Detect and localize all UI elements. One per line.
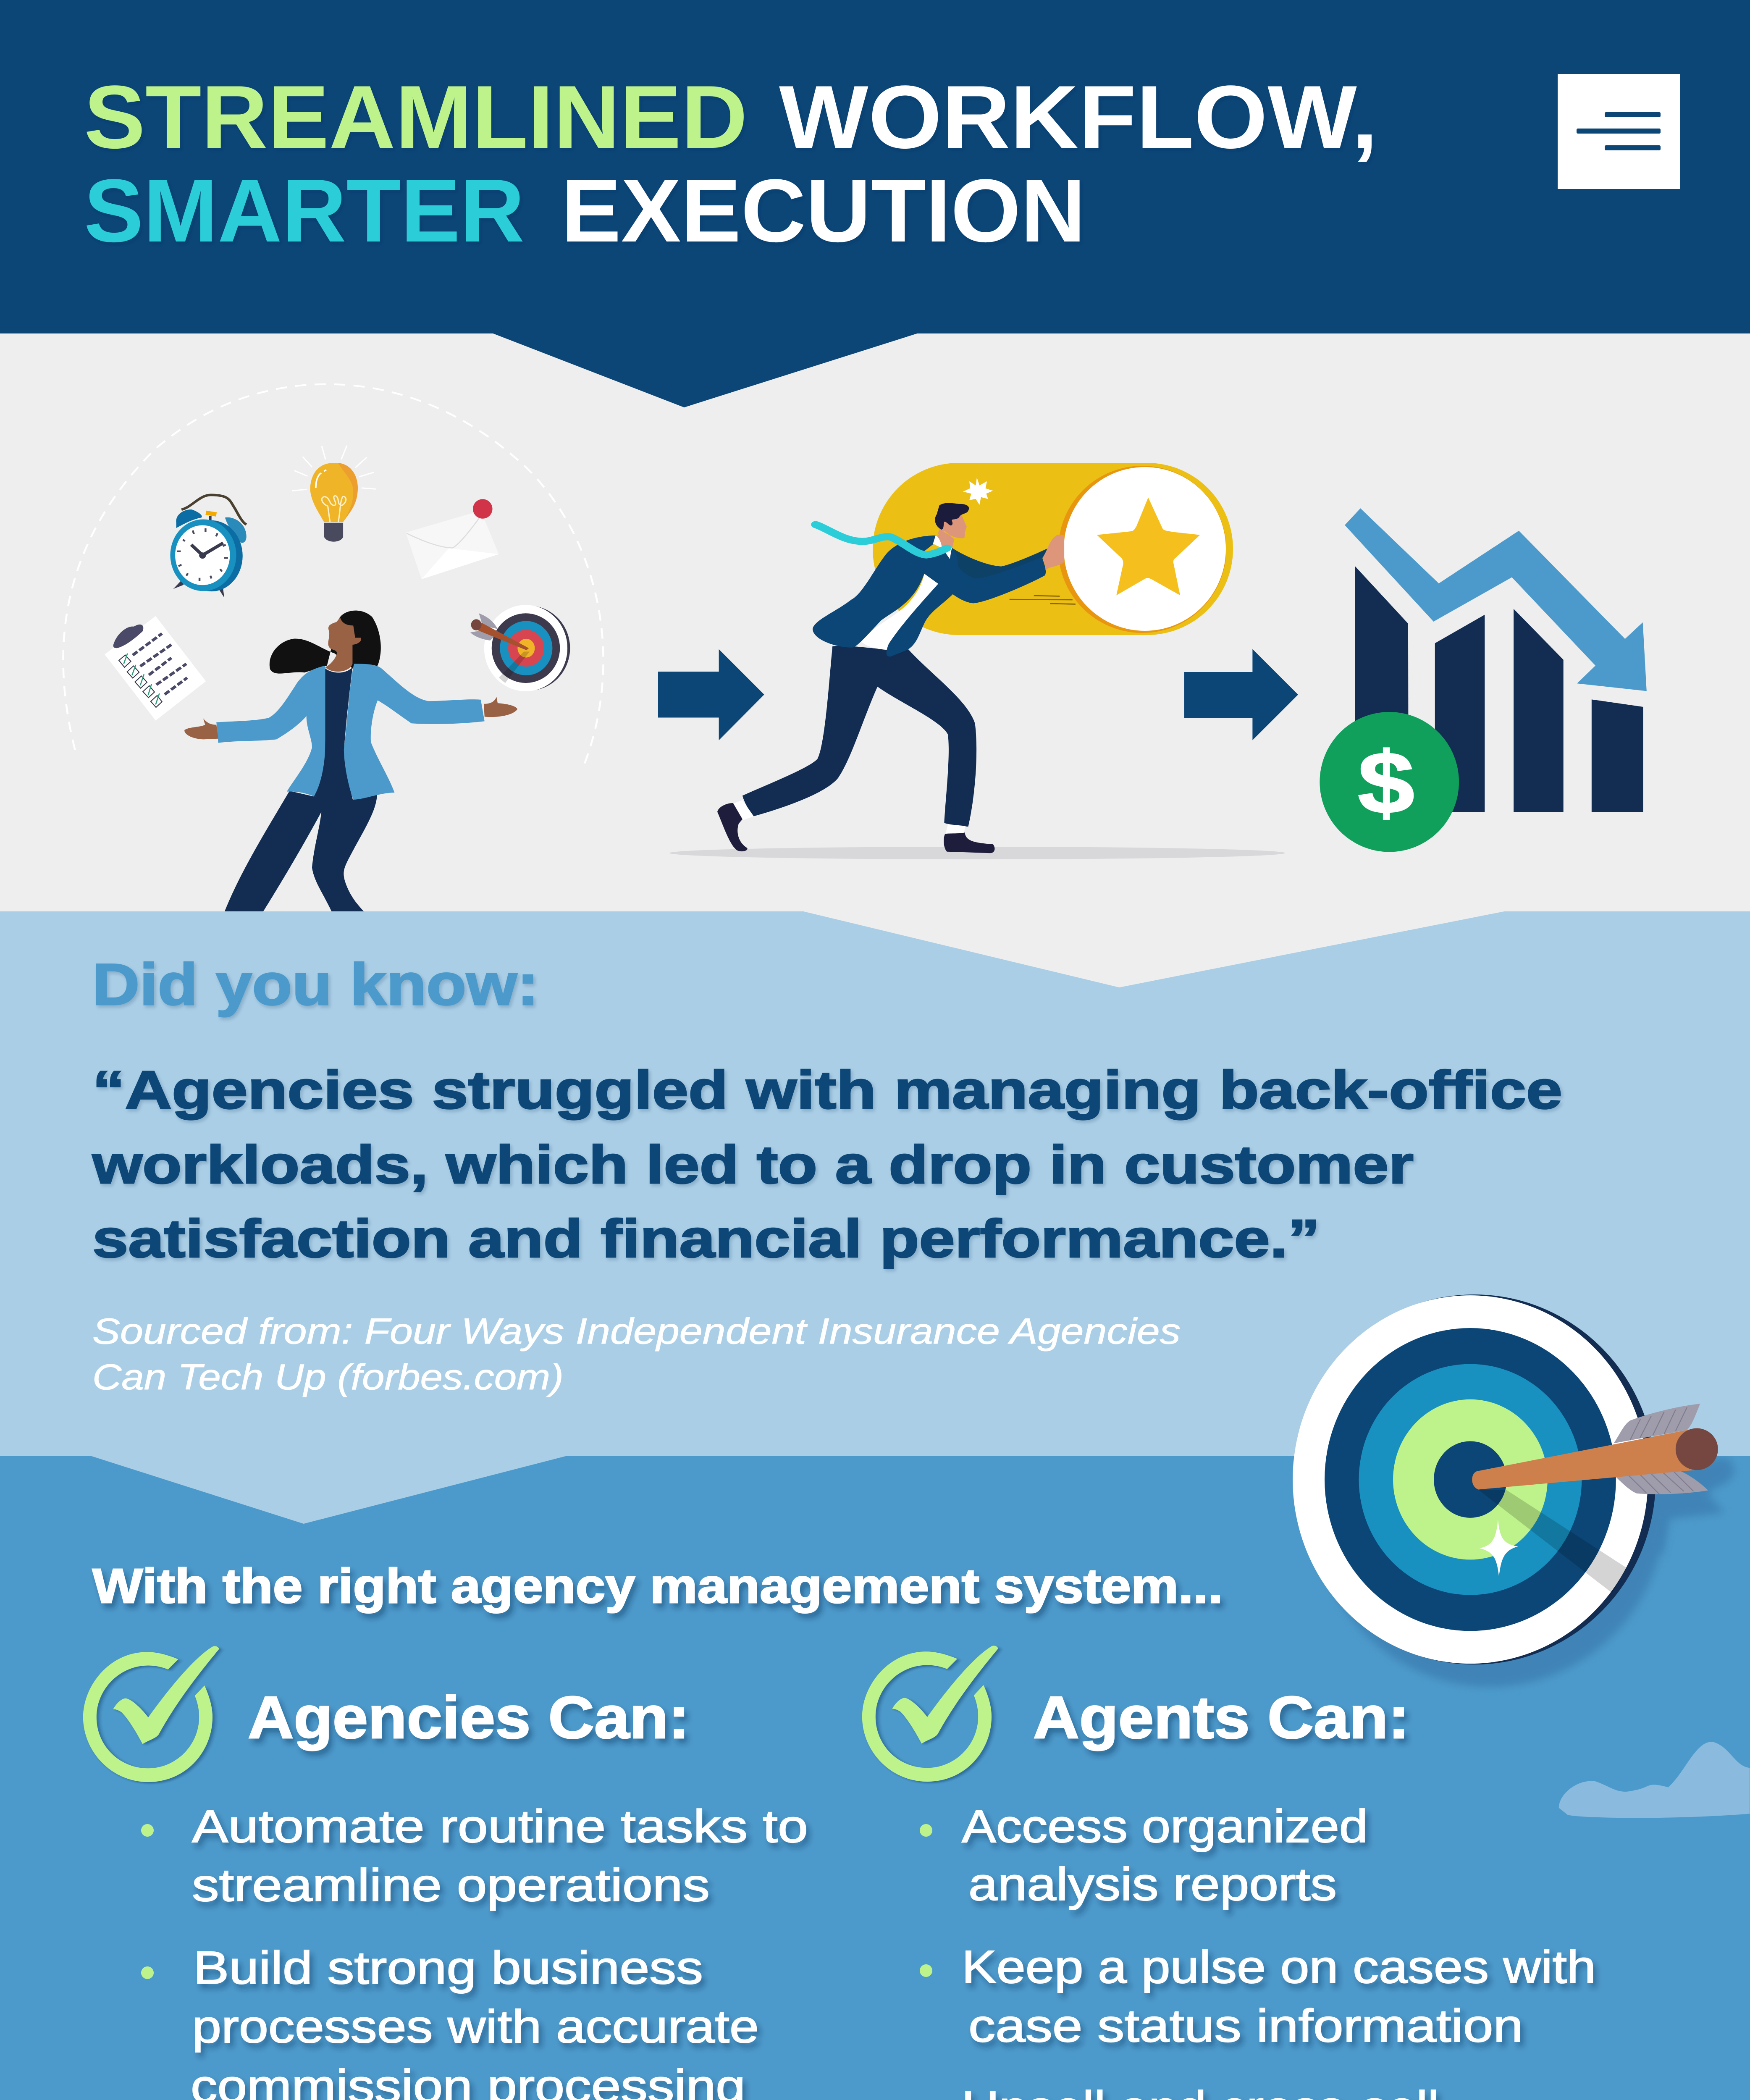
- text: system intro: With the right agency management system...: [92, 1559, 1223, 1613]
- text: source note: [92, 1311, 1181, 1397]
- heading: agencies can: Agencies Can:: [248, 1684, 690, 1751]
- bullets left: [141, 1824, 154, 2100]
- illustration: large target with arrow: [1293, 1294, 1734, 1687]
- icon: star toggle: [873, 463, 1233, 635]
- icon: light bulb: [292, 446, 376, 542]
- list text right: analysis reports: [968, 1858, 1337, 1910]
- text: quote: satisfaction and financial performance.”: [92, 1209, 1320, 1269]
- text: source note: Sourced from: Four Ways Independent Insurance Agencies: [92, 1311, 1181, 1352]
- title: EXECUTION: [561, 161, 1086, 261]
- list text right: [962, 1801, 1596, 2100]
- icon: cloud right: [1559, 1742, 1750, 1818]
- list text right: Access organized: [962, 1801, 1368, 1852]
- icon: envelope: [406, 499, 499, 579]
- text: quote: workloads, which led to a drop in customer: [92, 1135, 1414, 1195]
- list text left: streamline operations: [192, 1859, 710, 1911]
- icon: menu box: [1558, 74, 1680, 189]
- list: agencies can: [141, 1801, 826, 2100]
- panel: blue system section background: [0, 1456, 1750, 2100]
- panel: illustration strip background: [0, 333, 1750, 987]
- icon: clipboard checklist: [105, 616, 206, 721]
- arrow: first process arrow: [658, 649, 764, 740]
- panel: header background: [0, 0, 1750, 407]
- list text right: case status information: [968, 2000, 1523, 2052]
- panel: did you know background: [0, 911, 1750, 1524]
- bullets right: [920, 1824, 932, 2100]
- arrow: second process arrow: [1184, 649, 1298, 740]
- list: agents can: [920, 1801, 1596, 2100]
- heading: agents can: Agents Can:: [1033, 1684, 1409, 1751]
- icon: dollar sign: $: [1358, 734, 1414, 832]
- title: [84, 67, 1378, 261]
- text: quote: “Agencies struggled with managing back-office: [92, 1060, 1562, 1120]
- list text left: [190, 1801, 826, 2100]
- icon: small target: [470, 605, 570, 691]
- figure: running man: [717, 478, 1076, 853]
- illustration: woman juggling tasks: [63, 384, 603, 911]
- icon: agents checkmark: [862, 1646, 998, 1782]
- illustration: man pushing star toggle: [669, 463, 1285, 859]
- title: SMARTER: [84, 161, 525, 261]
- chart: falling bars with arrow and coin: [1320, 508, 1647, 852]
- title: WORKFLOW,: [779, 67, 1378, 167]
- list text left: processes with accurate: [192, 2001, 759, 2053]
- text: source note: Can Tech Up (forbes.com): [92, 1357, 564, 1397]
- list text right: Keep a pulse on cases with: [962, 1941, 1596, 1993]
- title: STREAMLINED: [84, 67, 748, 167]
- text: did you know heading: Did you know:: [92, 951, 539, 1017]
- figure: woman: [184, 611, 517, 911]
- ground shadow: [669, 847, 1285, 859]
- text: quote: [92, 1060, 1562, 1269]
- list text left: Build strong business: [193, 1942, 703, 1994]
- list text left: Automate routine tasks to: [192, 1801, 808, 1852]
- icon: agencies checkmark: [83, 1646, 219, 1782]
- icon: alarm clock: [170, 495, 247, 598]
